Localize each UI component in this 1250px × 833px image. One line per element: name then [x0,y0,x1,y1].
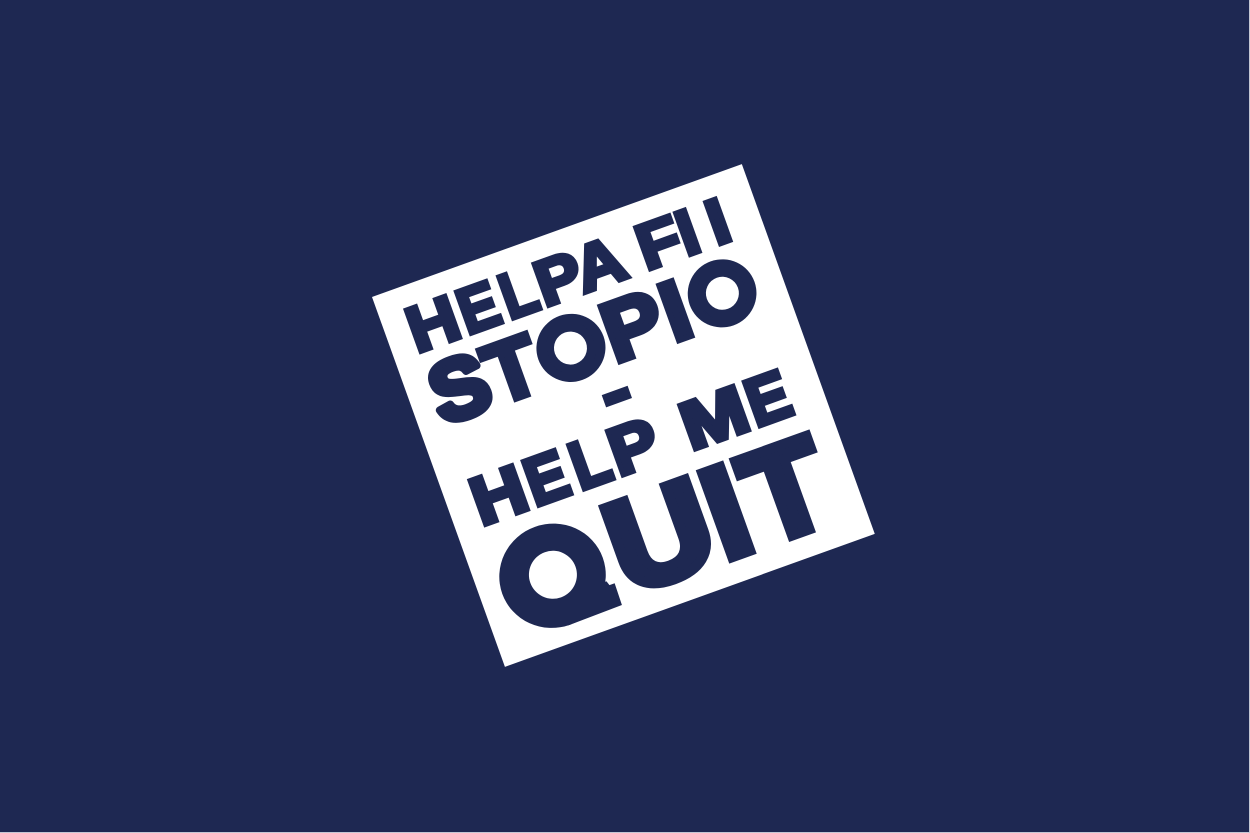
heading: Help Me: P [598,403,669,490]
letter O second: O [674,239,771,350]
heading: Help Me: E [514,435,579,521]
heading: Helpa Fi I: A [564,223,635,307]
letter T: T [724,410,847,572]
letter O first: O [523,293,620,405]
heading: Stopio: T [471,316,552,422]
letter U: U [587,450,732,621]
heading: Help Me: H [461,452,537,540]
heading: Stopio [428,259,756,423]
second O counter [701,272,743,314]
heading: Helpa Fi I: F [627,202,691,284]
heading: Helpa Fi I: I [697,185,739,259]
dash divider [602,386,632,407]
rotated logo badge [372,164,875,668]
heading: Helpa Fi I: E [448,268,509,349]
letter Q counter [522,544,584,605]
first O counter [549,327,592,369]
heading: Help Me [460,355,801,540]
heading: Help Me: M [670,371,758,464]
heading: Quit [499,429,818,628]
letter P: P [589,272,677,381]
letter Q tail [563,577,623,624]
light edge: right [1249,0,1250,833]
heading: Helpa Fi I: H [397,282,469,367]
heading: Stopio: S [417,335,503,443]
heading: Help Me: E [735,356,801,441]
letter Q bowl: Q [480,488,626,660]
letter I: I [648,263,703,360]
light edge: bottom [0,832,1250,833]
heading: Help Me: L [560,421,620,504]
heading: Helpa Fi I: I [666,195,708,269]
letter I: I [684,438,768,586]
heading: Helpa Fi I: P [525,238,593,321]
white square [372,164,875,667]
heading: Helpa Fi I: L [490,253,547,333]
heading: Helpa Fi I [397,184,740,367]
